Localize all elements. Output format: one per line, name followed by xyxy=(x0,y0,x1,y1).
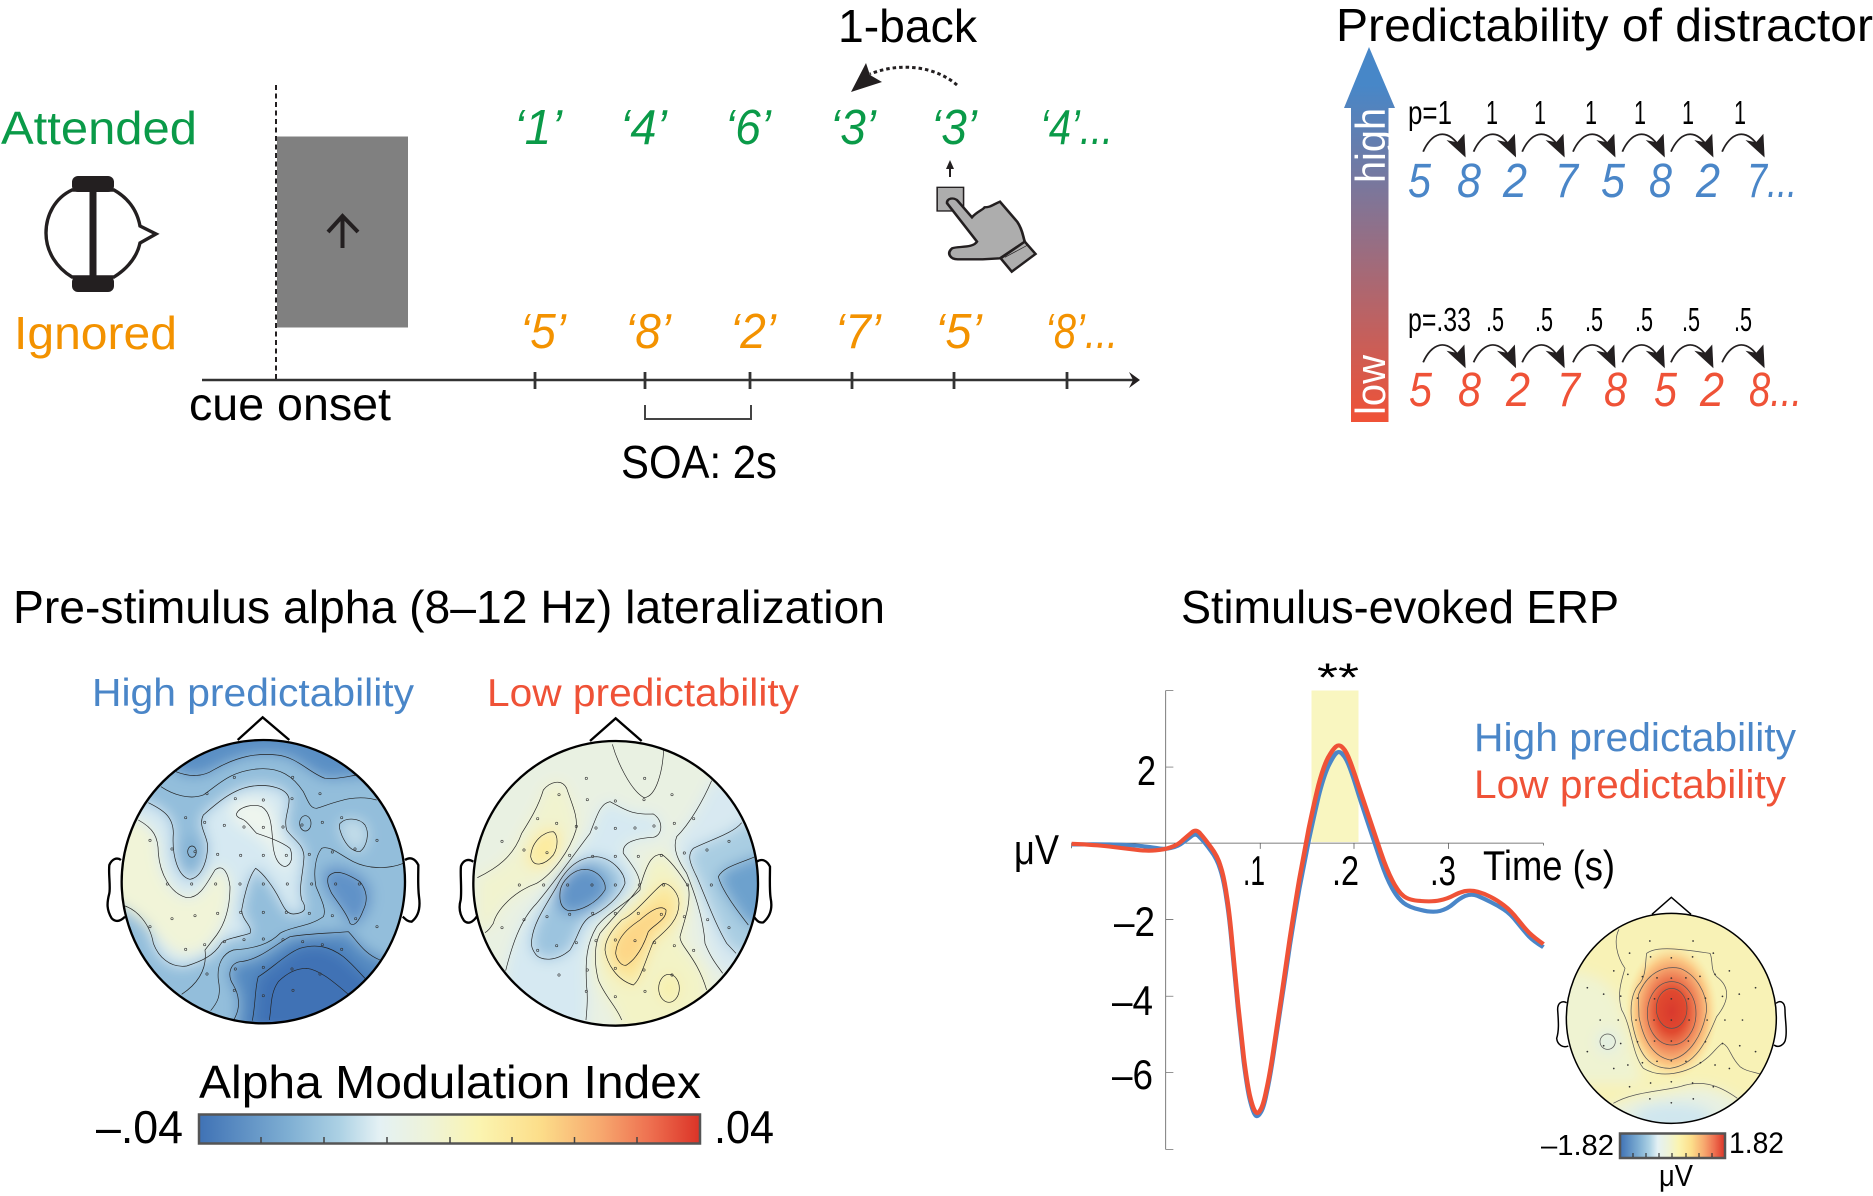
x tick labels: .1 xyxy=(1243,847,1265,894)
y tick labels: μV xyxy=(1014,826,1059,873)
low predictability probabilities: .5 xyxy=(1535,301,1553,338)
low predictability digit sequence: 8 xyxy=(1604,364,1627,417)
ignored digit sequence xyxy=(520,305,1118,359)
low predictability probabilities: .5 xyxy=(1734,301,1752,338)
label: SOA: SOA: 2s xyxy=(621,436,777,488)
heading: Stimulus-evoked ERP: Stimulus-evoked ERP xyxy=(1181,581,1619,633)
ignored digit sequence: ‘2’ xyxy=(730,305,777,359)
high predictability digit sequence: 5 xyxy=(1408,155,1431,208)
arrow: response to digit xyxy=(946,160,954,177)
label: 1-back: 1-back xyxy=(838,0,978,52)
high predictability digit sequence: 2 xyxy=(1502,155,1527,208)
low predictability digit sequence: 8... xyxy=(1749,364,1802,417)
x tick labels: Time (s) xyxy=(1483,842,1615,889)
low predictability probabilities: .5 xyxy=(1585,301,1603,338)
head outline xyxy=(108,717,420,1023)
label: Low predictability topography: Low predictability xyxy=(487,672,800,715)
colorbar: ERP microvolts: –1.82 xyxy=(1541,1130,1614,1162)
significance window xyxy=(1312,690,1358,842)
high predictability digit sequence: 8 xyxy=(1457,155,1481,208)
low predictability transition arrows xyxy=(1423,345,1764,367)
colorbar: ERP microvolts: 1.82 xyxy=(1729,1127,1784,1160)
attended digit sequence xyxy=(514,101,1113,155)
y tick labels: 2 xyxy=(1137,747,1156,794)
attended digit sequence: ‘3’ xyxy=(830,101,877,155)
low predictability probabilities xyxy=(1408,301,1752,338)
low predictability digit sequence: 8 xyxy=(1458,364,1481,417)
legend: ERP conditions xyxy=(1474,716,1796,807)
high predictability probabilities xyxy=(1408,94,1746,131)
high predictability probabilities: 1 xyxy=(1682,94,1694,131)
high predictability trace xyxy=(1072,752,1543,1116)
ignored digit sequence: ‘8’... xyxy=(1045,305,1118,359)
SOA bracket xyxy=(645,405,751,419)
heading: alpha lateralization: Pre-stimulus alpha (8–12 Hz) lateralization xyxy=(13,581,885,633)
topography: low predictability xyxy=(453,718,780,1047)
sensors xyxy=(149,776,378,997)
arrow: 1-back dotted xyxy=(851,63,957,92)
y tick labels: –2 xyxy=(1114,898,1155,945)
icon: head with attention direction xyxy=(46,176,156,292)
arrow: predictability gradient xyxy=(1344,47,1395,422)
sensors xyxy=(1586,940,1756,1104)
attended digit sequence: ‘3’ xyxy=(931,101,978,155)
axes xyxy=(1072,691,1543,1149)
label: Alpha Modulation Index: Alpha Modulation Index xyxy=(199,1056,701,1108)
y tick labels: –4 xyxy=(1112,977,1153,1024)
high predictability digit sequence: 7 xyxy=(1555,155,1580,208)
topography: high predictability xyxy=(103,717,423,1040)
low predictability digit sequence: 5 xyxy=(1654,364,1677,417)
chart: stimulus-evoked ERP xyxy=(1014,656,1615,1149)
high predictability probabilities: 1 xyxy=(1534,94,1546,131)
arrow: predictability gradient: high xyxy=(1347,108,1394,183)
high predictability transition arrows xyxy=(1423,134,1764,157)
x tick labels: .3 xyxy=(1430,847,1456,894)
contour lines xyxy=(125,754,403,1021)
colorbar: alpha modulation index: .04 xyxy=(714,1101,774,1153)
y tick labels: –6 xyxy=(1112,1051,1153,1098)
attended digit sequence: ‘4’... xyxy=(1040,101,1113,155)
heading: Predictability of distractor: Predictability of distractor xyxy=(1336,0,1873,51)
label: High predictability topography: High predictability xyxy=(92,672,415,715)
low predictability probabilities: .5 xyxy=(1682,301,1700,338)
head outline xyxy=(460,718,771,1026)
timeline axis xyxy=(202,372,1140,389)
ignored digit sequence: ‘8’ xyxy=(625,305,672,359)
cue onset dashed line xyxy=(275,85,277,380)
significance stars: ** xyxy=(1317,656,1359,700)
ignored digit sequence: ‘5’ xyxy=(935,305,983,359)
high predictability digit sequence: 2 xyxy=(1695,155,1720,208)
colorbar: alpha modulation index xyxy=(96,1101,774,1153)
contour lines xyxy=(1600,929,1760,1103)
x tick labels xyxy=(1243,842,1615,894)
contour lines xyxy=(477,744,755,1020)
high predictability digit sequence xyxy=(1408,155,1797,208)
low predictability probabilities: .5 xyxy=(1486,301,1504,338)
head outline xyxy=(1557,897,1786,1123)
colorbar: ERP microvolts: μV xyxy=(1659,1158,1693,1193)
high predictability digit sequence: 7... xyxy=(1747,155,1797,208)
arrow: predictability gradient: low xyxy=(1347,354,1394,415)
icon: hand pressing button xyxy=(937,187,1036,272)
cue screen with arrow xyxy=(277,136,408,328)
colorbar: ERP microvolts xyxy=(1541,1127,1784,1193)
high predictability probabilities: p=1 xyxy=(1408,94,1452,131)
label: Ignored: Ignored xyxy=(14,307,177,359)
ignored digit sequence: ‘7’ xyxy=(835,305,882,359)
high predictability digit sequence: 5 xyxy=(1601,155,1625,208)
high predictability probabilities: 1 xyxy=(1634,94,1646,131)
attended digit sequence: ‘4’ xyxy=(620,101,668,155)
colorbar: alpha modulation index: –.04 xyxy=(96,1101,183,1153)
low predictability digit sequence xyxy=(1409,364,1802,417)
legend: ERP conditions: High predictability xyxy=(1474,716,1796,760)
low predictability digit sequence: 7 xyxy=(1557,364,1582,417)
legend: ERP conditions: Low predictability xyxy=(1474,763,1786,807)
high predictability probabilities: 1 xyxy=(1734,94,1746,131)
topography: ERP scalp map xyxy=(1556,896,1787,1124)
low predictability probabilities: p=.33 xyxy=(1408,301,1471,338)
attended digit sequence: ‘6’ xyxy=(725,101,772,155)
label: Attended: Attended xyxy=(1,102,197,154)
ignored digit sequence: ‘5’ xyxy=(520,305,567,359)
y tick labels xyxy=(1014,747,1156,1098)
high predictability probabilities: 1 xyxy=(1585,94,1597,131)
low predictability digit sequence: 2 xyxy=(1505,364,1530,417)
x tick labels: .2 xyxy=(1332,847,1359,894)
low predictability trace xyxy=(1072,745,1543,1113)
high predictability digit sequence: 8 xyxy=(1649,155,1672,208)
high predictability probabilities: 1 xyxy=(1486,94,1498,131)
label: cue onset: cue onset xyxy=(189,378,391,430)
attended digit sequence: ‘1’ xyxy=(514,101,563,155)
low predictability digit sequence: 5 xyxy=(1409,364,1432,417)
low predictability digit sequence: 2 xyxy=(1699,364,1724,417)
low predictability probabilities: .5 xyxy=(1635,301,1653,338)
sensors xyxy=(501,777,730,998)
